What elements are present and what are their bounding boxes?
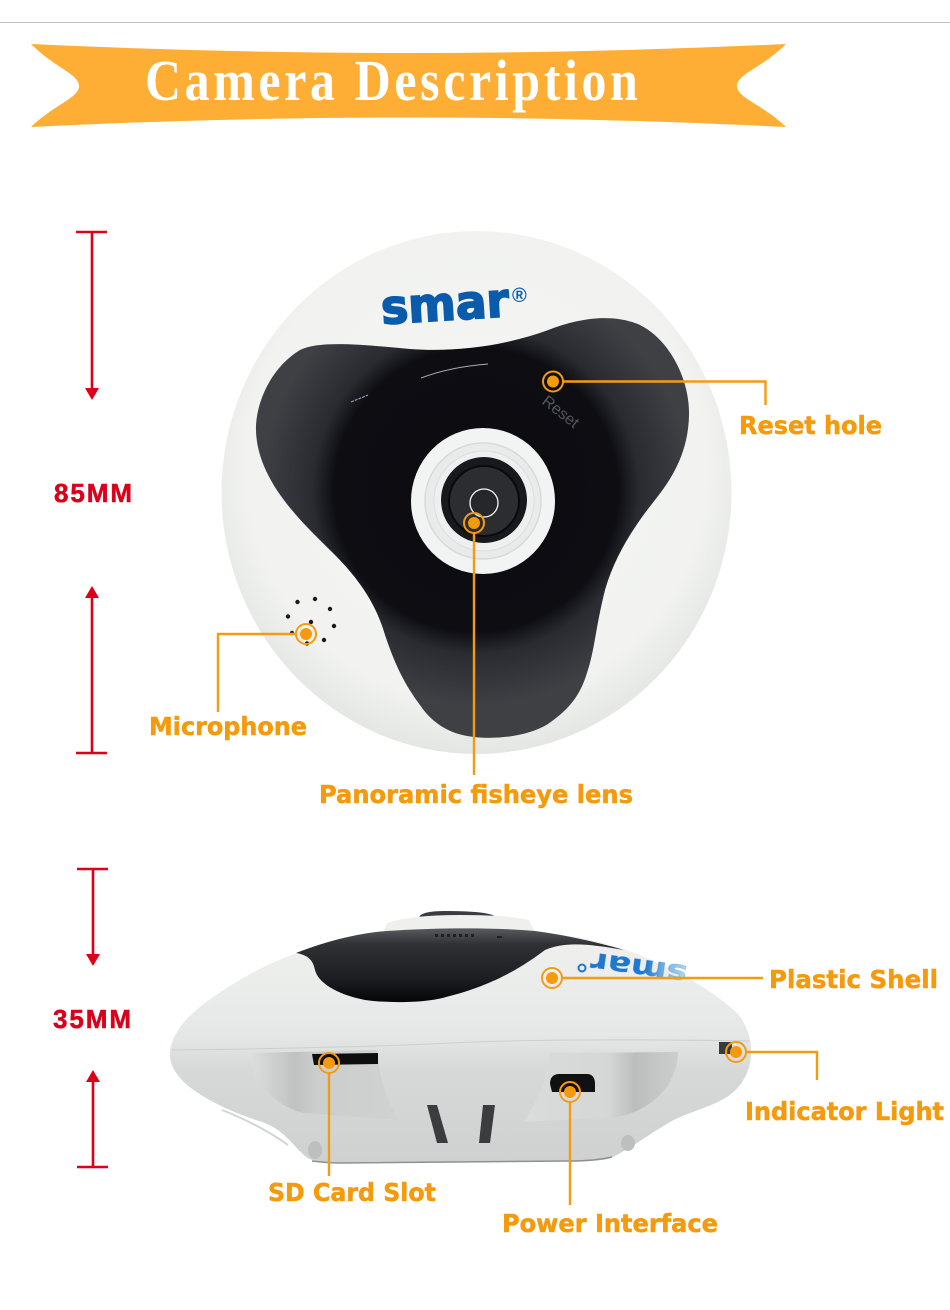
lens assembly — [411, 428, 555, 574]
black face panel — [256, 318, 689, 738]
top bump and lens — [383, 911, 536, 934]
callout: panoramic fisheye lens: Panoramic fisheye lens — [319, 780, 633, 809]
reset label on camera: Reset — [539, 393, 582, 432]
callout: reset hole: Reset hole — [739, 411, 882, 440]
callout: indicator light: Indicator Light — [745, 1097, 944, 1126]
callout: indicator light — [726, 1042, 944, 1126]
black face panel side — [296, 928, 624, 1002]
camera side view — [170, 911, 751, 1163]
callout: plastic shell — [542, 965, 938, 994]
brand logo side view — [578, 945, 689, 990]
callout: panoramic fisheye lens — [319, 513, 633, 809]
camera top view — [222, 231, 732, 754]
shell body — [170, 928, 751, 1163]
callout: power interface — [502, 1082, 718, 1238]
callout: reset hole — [543, 372, 882, 440]
dimension: 35MM — [53, 869, 131, 1167]
indicator light — [719, 1042, 732, 1054]
microphone holes — [286, 597, 336, 646]
dimension: 85MM: 85MM — [54, 478, 132, 508]
callout: microphone — [149, 624, 316, 741]
brand logo: ® — [512, 285, 527, 307]
brand logo: smar — [379, 273, 511, 336]
dimension: 85MM — [54, 232, 132, 753]
callout: microphone: Microphone — [149, 712, 307, 741]
callout: SD card slot — [268, 1053, 436, 1207]
callout: plastic shell: Plastic Shell — [769, 965, 938, 994]
right recess — [523, 1052, 678, 1122]
SD card slot — [312, 1053, 378, 1065]
brand logo side view: smar — [588, 945, 689, 990]
title banner — [31, 44, 786, 127]
dimension: 35MM: 35MM — [53, 1004, 131, 1034]
vents — [427, 1105, 495, 1143]
title text: Camera Description — [145, 49, 638, 113]
micro USB port — [550, 1074, 595, 1092]
callout: SD card slot: SD Card Slot — [268, 1178, 436, 1207]
callout: power interface: Power Interface — [502, 1209, 718, 1238]
left recess — [251, 1050, 399, 1120]
base grooves — [222, 1110, 678, 1145]
